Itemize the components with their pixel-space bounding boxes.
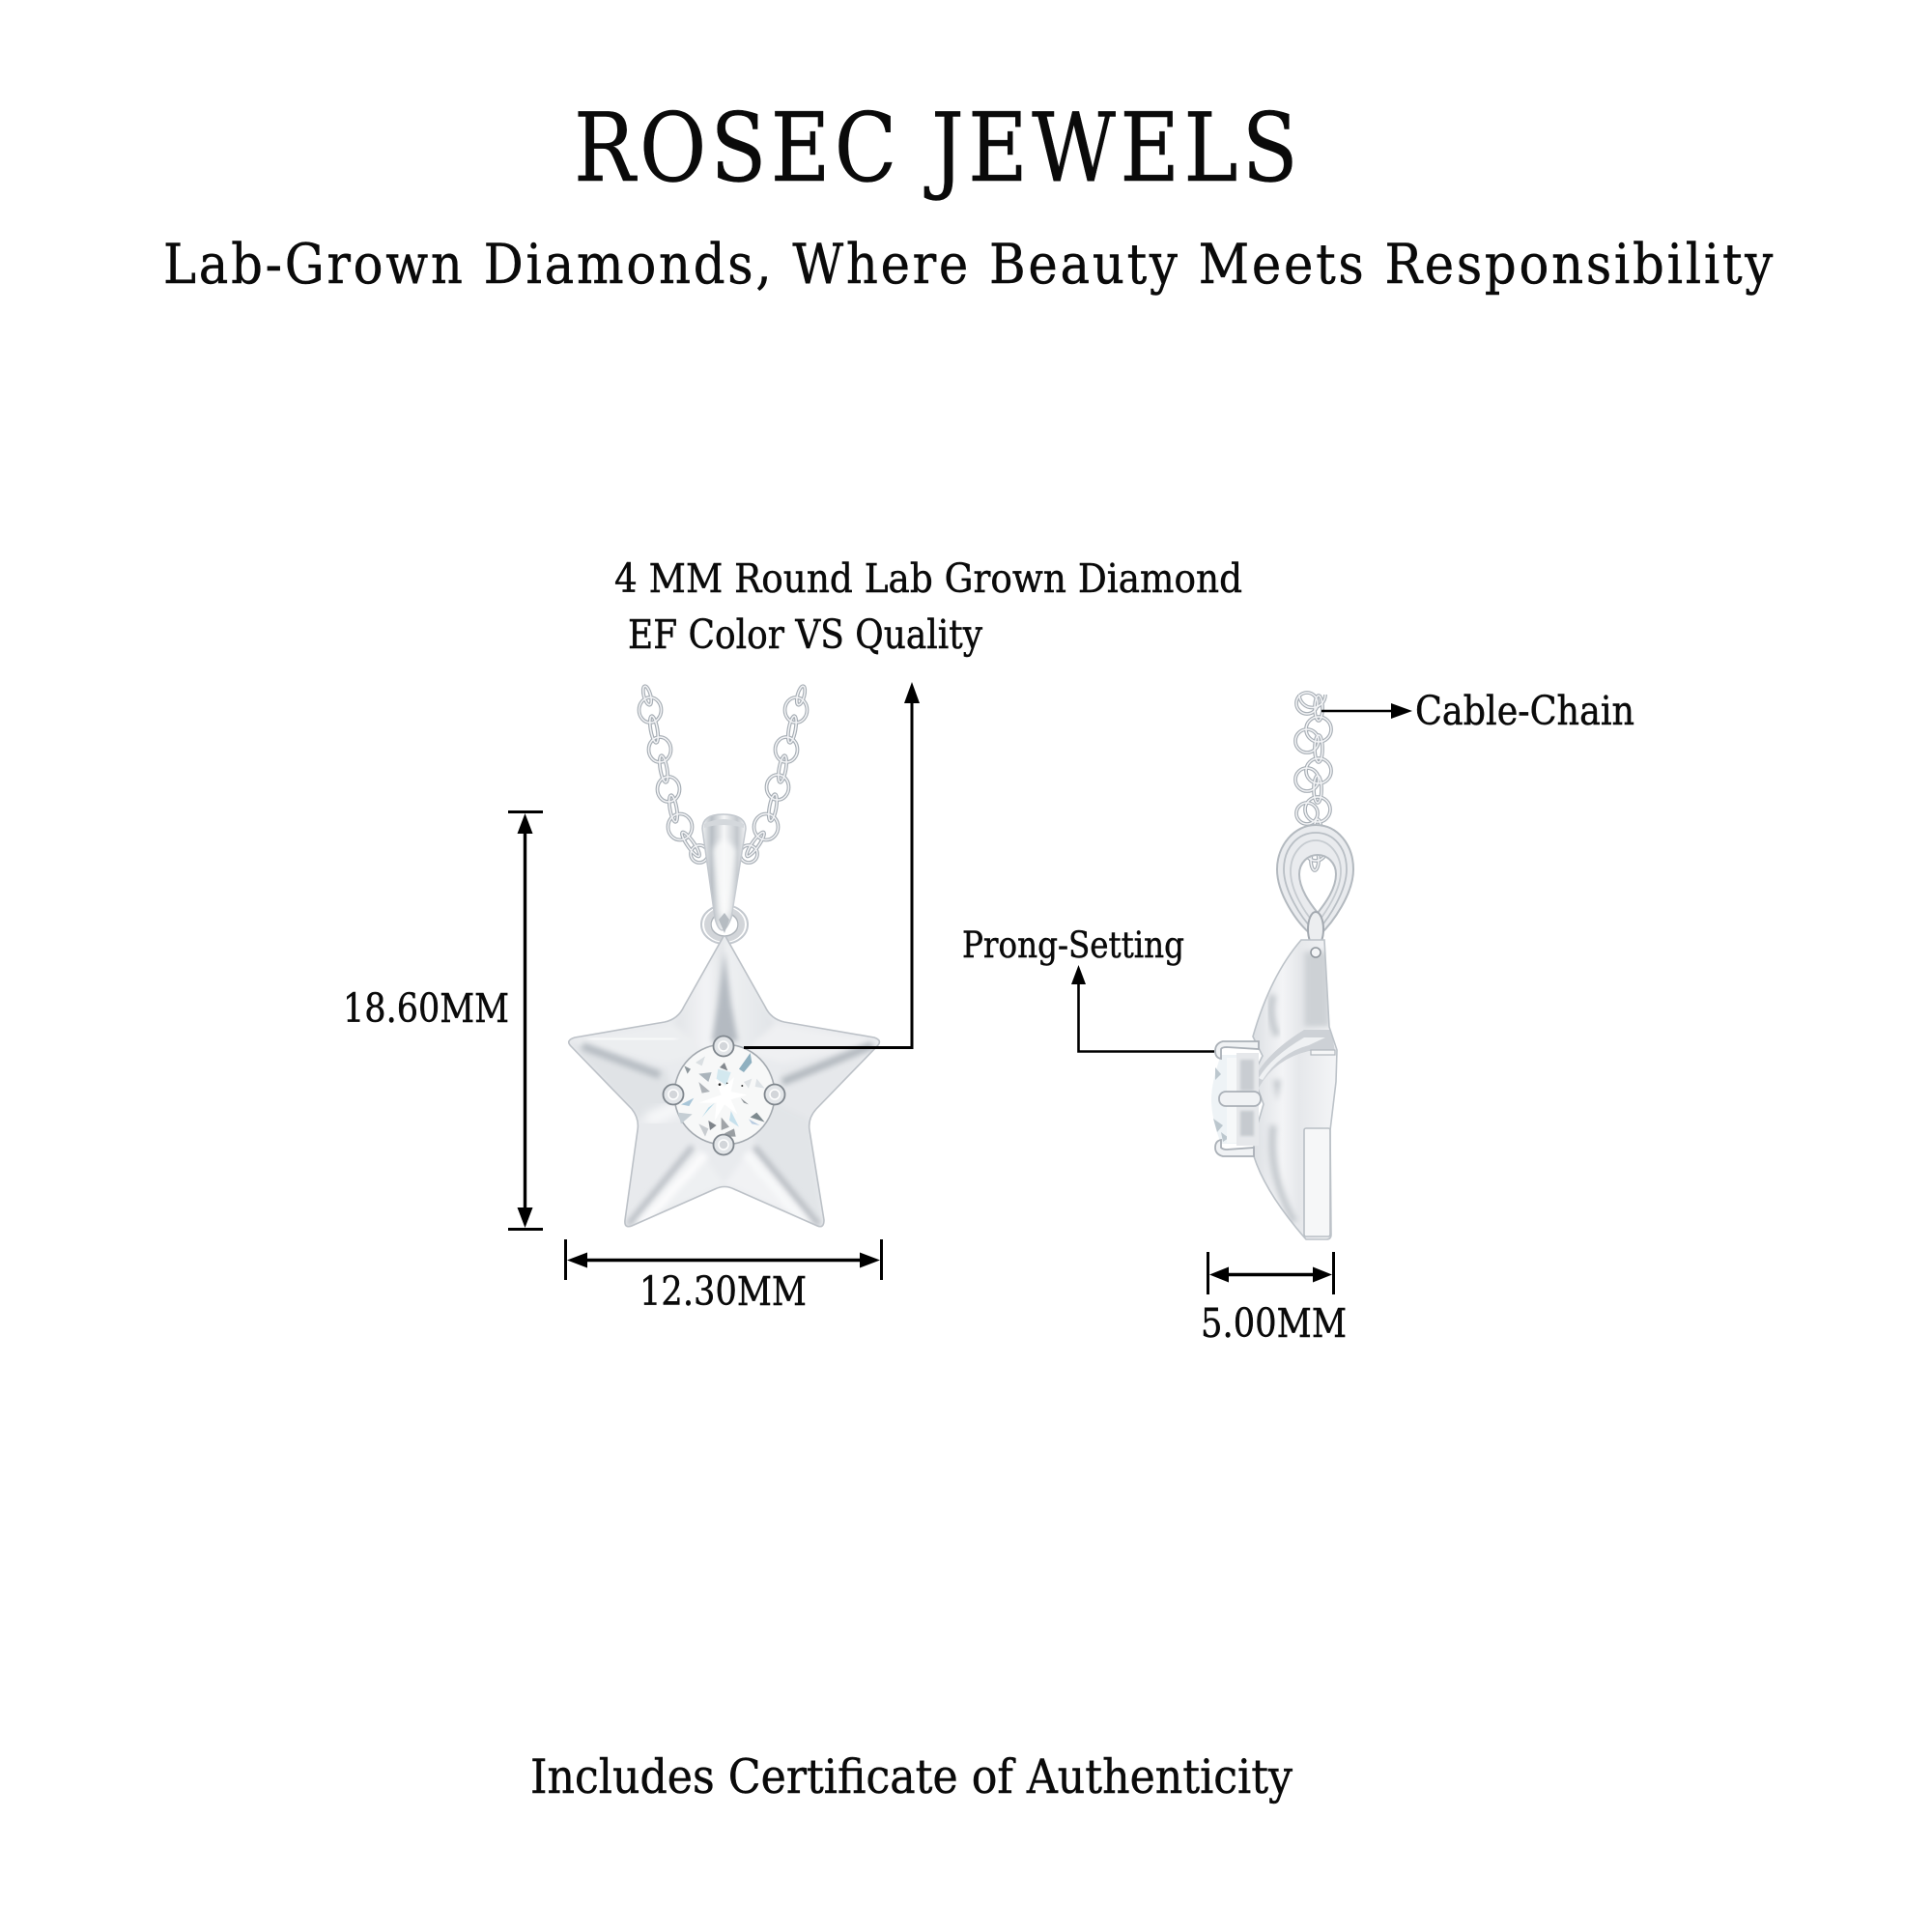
depth label: 5.00MM: [1201, 1300, 1347, 1347]
star body: [568, 936, 881, 1227]
right chain: [740, 685, 808, 863]
side bail loop: [1277, 825, 1353, 947]
certificate note: Includes Certificate of Authenticity: [530, 1749, 1293, 1804]
cable chain arrow: [1321, 703, 1412, 719]
width label: 12.30MM: [639, 1268, 807, 1315]
side prongs: [1215, 1041, 1261, 1156]
depth dimension: [1208, 1252, 1333, 1294]
prong setting label: Prong-Setting: [962, 924, 1184, 966]
front view pendant: [568, 685, 881, 1227]
diamond label: EF Color VS Quality: [628, 611, 983, 658]
jump ring: [701, 905, 748, 944]
side body: [1253, 940, 1337, 1239]
diamond label: [614, 555, 1242, 658]
side chain: [1295, 693, 1331, 870]
side diamond: [1211, 1055, 1236, 1144]
left chain: [639, 685, 708, 863]
title: ROSEC JEWELS: [574, 94, 1302, 204]
side view pendant: [1211, 693, 1353, 1239]
prong setting arrow: [1071, 965, 1214, 1051]
diamond label: 4 MM Round Lab Grown Diamond: [614, 555, 1242, 602]
bail: [702, 814, 746, 933]
subtitle: Lab-Grown Diamonds, Where Beauty Meets Responsibility: [163, 233, 1776, 297]
height dimension: [508, 811, 543, 1229]
diamond: [674, 1044, 775, 1145]
side gallery: [1236, 1053, 1259, 1146]
prongs: [663, 1036, 784, 1155]
diamond leader arrow: [744, 682, 920, 1047]
cable chain label: Cable-Chain: [1415, 688, 1634, 734]
width dimension: [566, 1239, 881, 1280]
height label: 18.60MM: [343, 985, 509, 1032]
